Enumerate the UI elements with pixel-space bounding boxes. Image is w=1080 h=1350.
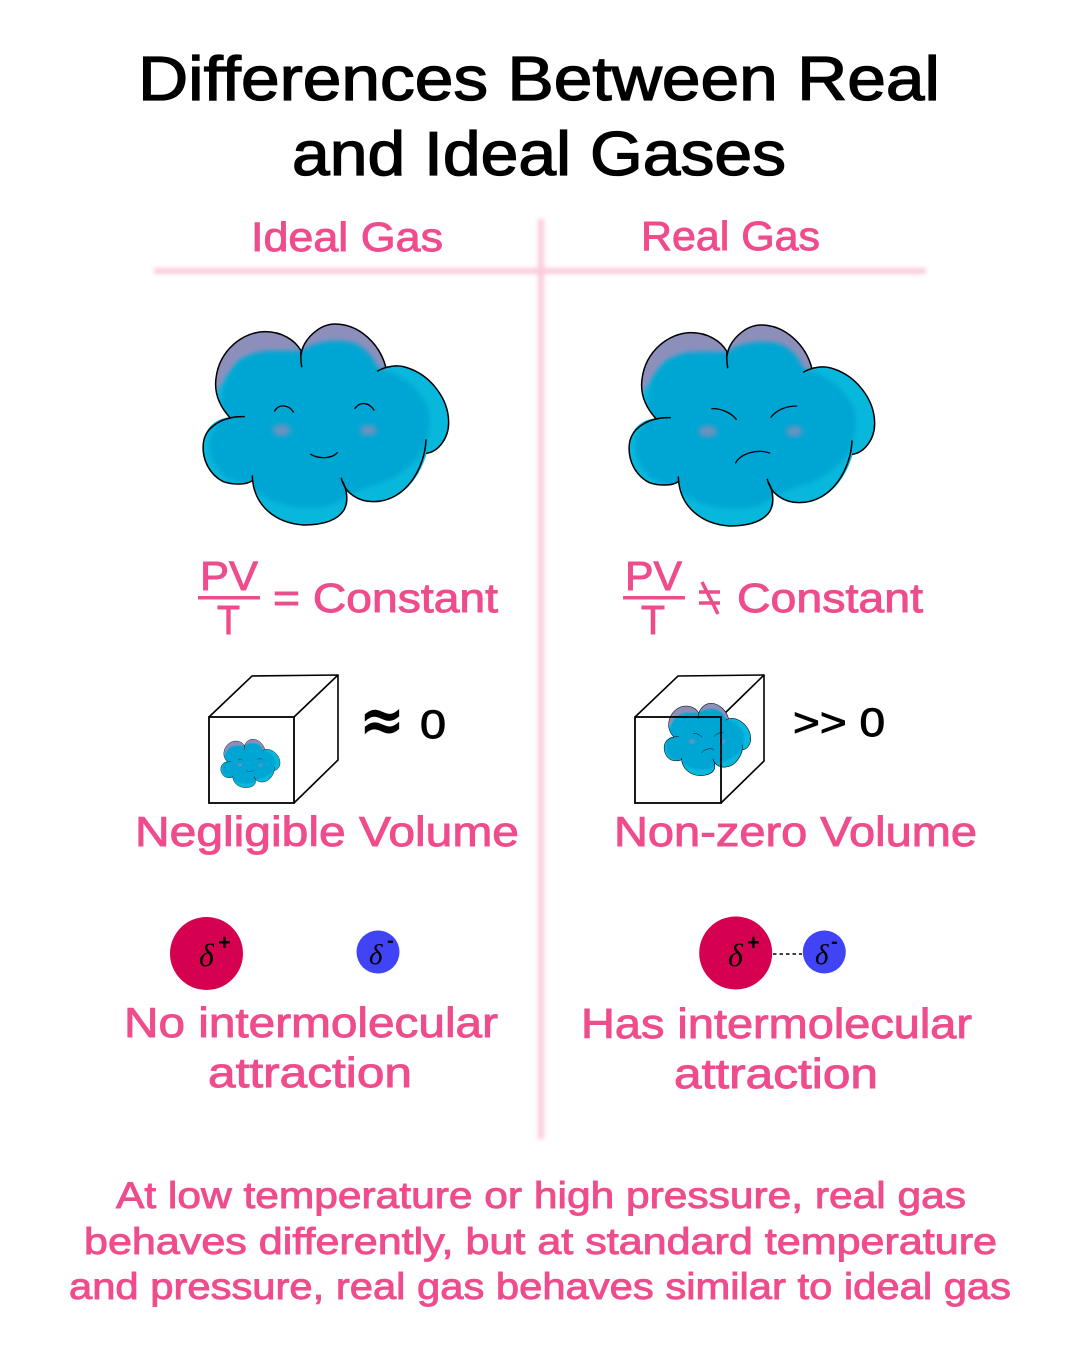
equation: ideal gas law fails: PV <box>625 553 683 599</box>
label: much greater than zero: >> 0 <box>793 701 885 745</box>
label: approximately zero: ≈ <box>359 683 405 756</box>
text: no intermolecular attraction: No intermolecular <box>124 999 498 1046</box>
horizontal divider <box>154 268 926 274</box>
vertical divider <box>538 219 544 1139</box>
title: Differences Between Real <box>138 45 940 114</box>
heading: ideal gas: Ideal Gas <box>251 214 443 260</box>
icon: separate charged particles: δ <box>369 939 383 971</box>
equation: ideal gas law holds: = Constant <box>273 575 499 621</box>
equation: ideal gas law fails: Constant <box>737 575 924 621</box>
text: no intermolecular attraction <box>124 999 498 1096</box>
equation: ideal gas law fails <box>623 553 924 643</box>
icon: separate charged particles: + <box>218 930 231 955</box>
icon: grumpy cloud <box>629 314 875 526</box>
equation: ideal gas law holds: PV <box>200 553 259 599</box>
title: and Ideal Gases <box>292 120 786 189</box>
footer note: and pressure, real gas behaves similar to ideal gas <box>69 1266 1011 1307</box>
label: approximately zero: 0 <box>420 703 446 747</box>
icon: attracted charged particles: + <box>747 930 760 955</box>
icon: separate charged particles <box>170 917 400 990</box>
text: has intermolecular attraction: Has intermolecular <box>581 1000 972 1047</box>
footer note <box>69 1175 1011 1307</box>
icon: attracted charged particles: - <box>831 931 838 953</box>
icon: attracted charged particles: δ <box>815 939 829 971</box>
label: negligible volume: Negligible Volume <box>135 808 519 855</box>
text: has intermolecular attraction: attraction <box>674 1050 878 1097</box>
text: no intermolecular attraction: attraction <box>208 1049 412 1096</box>
icon: separate charged particles: - <box>387 930 394 952</box>
equation: ideal gas law fails: T <box>641 597 665 643</box>
icon: cube with tiny cloud <box>209 675 338 803</box>
footer note: At low temperature or high pressure, real gas <box>116 1175 966 1216</box>
icon: happy cloud <box>203 313 449 525</box>
icon: attracted charged particles <box>699 916 846 990</box>
footer note: behaves differently, but at standard temperature <box>84 1221 997 1262</box>
title <box>138 45 940 189</box>
equation: ideal gas law holds: T <box>217 597 240 643</box>
icon: cube with large cloud <box>635 675 764 803</box>
icon: attracted charged particles: δ <box>728 937 744 973</box>
equation: ideal gas law holds <box>198 553 499 643</box>
text: has intermolecular attraction <box>581 1000 972 1097</box>
label: non-zero volume: Non-zero Volume <box>614 808 977 855</box>
heading: real gas: Real Gas <box>641 213 820 259</box>
label: approximately zero <box>359 683 446 756</box>
icon: separate charged particles: δ <box>199 937 215 973</box>
